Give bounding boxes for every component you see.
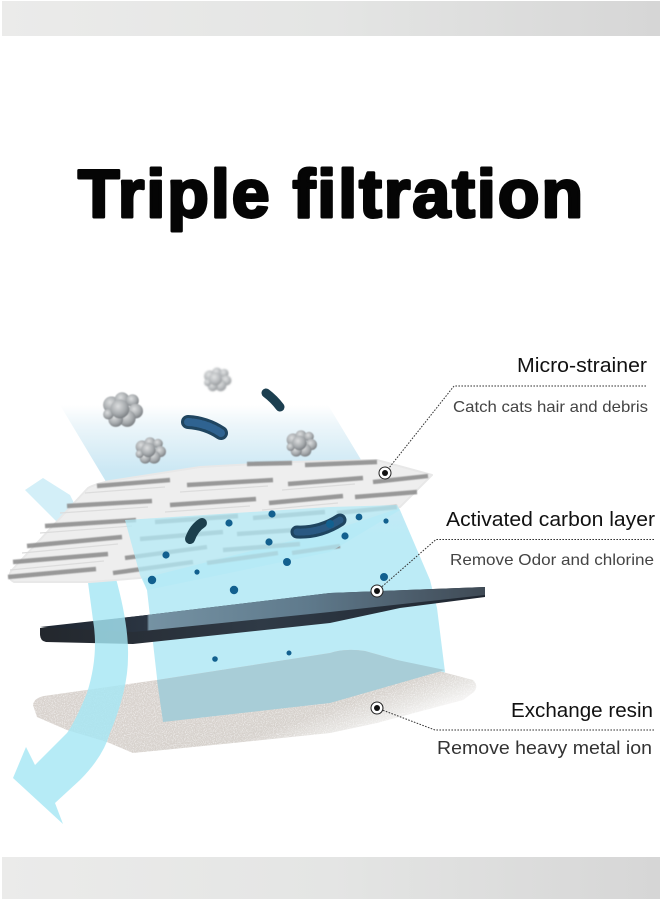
dust clusters [103, 367, 317, 464]
water particles below carbon [212, 650, 292, 662]
water tint over plate [125, 505, 400, 590]
bacteria [188, 393, 340, 539]
description: micro-strainer: Catch cats hair and debris [453, 399, 648, 416]
bottom grey band [2, 857, 660, 899]
heading: activated carbon: Activated carbon layer [446, 509, 655, 531]
carbon layer [40, 587, 485, 644]
marker: activated carbon [371, 585, 383, 597]
dust cluster blurred [204, 367, 231, 391]
dust cluster right [287, 430, 317, 457]
heading: micro-strainer: Micro-strainer [517, 355, 647, 377]
strainer faint stripes [10, 484, 355, 570]
strainer slots [8, 462, 428, 577]
callout: activated carbon [371, 509, 655, 597]
title: Triple filtration [78, 156, 583, 232]
dust cluster small [136, 437, 166, 464]
marker: exchange resin [371, 702, 383, 714]
marker: micro-strainer [379, 467, 391, 479]
callout: exchange resin [371, 700, 654, 758]
water particles [148, 510, 389, 594]
top grey band [2, 1, 660, 36]
description: exchange resin: Remove heavy metal ion [437, 738, 652, 758]
resin layer [33, 650, 476, 753]
heading: exchange resin: Exchange resin [511, 700, 653, 722]
micro-strainer plate [8, 460, 432, 590]
description: activated carbon: Remove Odor and chlorine [450, 552, 654, 569]
callout: micro-strainer [379, 355, 648, 479]
dust cluster large [103, 392, 143, 427]
resin tinted by water [157, 650, 445, 722]
flow arrow [13, 478, 128, 824]
filtered water beam [60, 405, 445, 730]
